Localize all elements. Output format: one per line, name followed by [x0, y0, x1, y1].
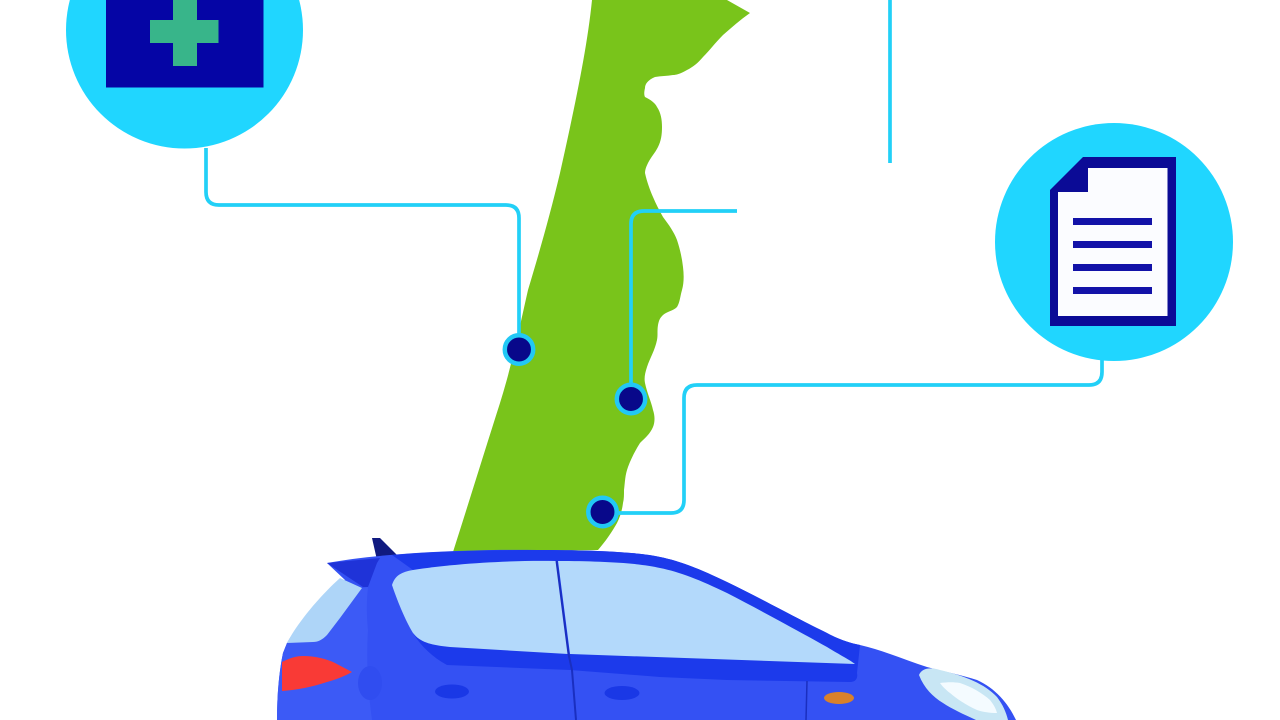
- car: side indicator: [824, 692, 854, 704]
- map pin: south: [588, 498, 617, 526]
- car: tail light: [282, 656, 352, 691]
- car: spoiler: [327, 558, 380, 587]
- car: side windows: [392, 561, 568, 654]
- car: [277, 538, 1016, 720]
- map pin: north: [505, 335, 533, 364]
- car: front door seam: [806, 681, 807, 720]
- car: rear quarter highlight: [277, 587, 372, 720]
- car: body: [277, 550, 1016, 720]
- map pin: center: [617, 385, 645, 413]
- car: rear door seam: [556, 561, 576, 720]
- car: headlight: [919, 668, 1008, 720]
- connector: top-right line to map pin: [631, 211, 737, 390]
- car: roof band and belt line: [392, 550, 860, 682]
- connector: top vertical line: [888, 0, 892, 163]
- car: door handles: [435, 684, 469, 698]
- car: rear window: [287, 578, 362, 643]
- map: green country shape: [453, 0, 750, 552]
- connector: document to map pin: [610, 360, 1102, 513]
- car: antenna: [372, 538, 398, 560]
- icon: document: [995, 123, 1233, 361]
- icon: first aid kit: [66, 0, 303, 148]
- car: pillar shade patch: [358, 666, 382, 700]
- connector: first aid to map pin: [206, 148, 519, 340]
- car: headlight highlight: [940, 682, 997, 713]
